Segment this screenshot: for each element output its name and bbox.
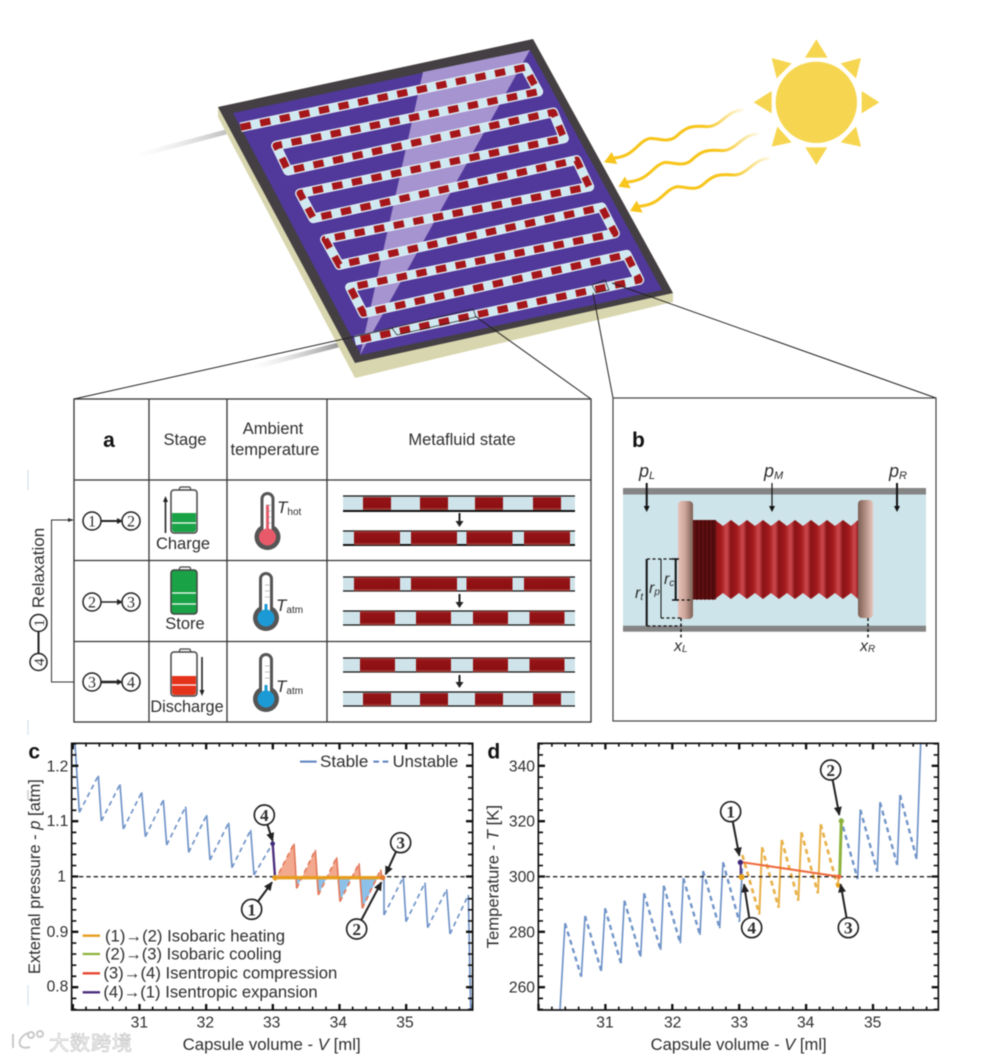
column headers (163, 420, 516, 459)
d frame and ticks (537, 743, 938, 1010)
thermometer: hot: T (277, 498, 287, 517)
thermometer: ambient store (253, 579, 303, 631)
pressure arrows and labels: p (764, 461, 774, 481)
c frame and ticks (72, 743, 473, 1010)
transition 3 to 4: 4 (127, 674, 135, 692)
column headers: Stage (163, 431, 207, 449)
serpentine tube (241, 67, 639, 341)
transition 1 to 2: 1 (88, 514, 96, 530)
transition 3 to 4: 3 (88, 674, 96, 692)
transition 2 to 3: 3 (127, 594, 135, 612)
thermometer: hot: hot (287, 507, 302, 518)
c tick labels: 1.2 (47, 758, 68, 775)
transition 2 to 3 (83, 593, 140, 612)
c tick labels: 33 (263, 1014, 281, 1031)
pressure arrows and labels: L (649, 470, 655, 482)
c legend process: (3)→(4) Isentropic compression (103, 963, 337, 982)
d cycle segments (738, 818, 844, 888)
panel b border (613, 398, 936, 721)
c state callouts: 1 (247, 900, 256, 919)
d tick labels: 260 (509, 980, 535, 997)
thermometer: ambient discharge: atm (286, 686, 303, 697)
radius and position labels: t (640, 592, 644, 603)
pressure arrows and labels: p (889, 461, 899, 481)
thermometer: ambient store: atm (286, 605, 303, 616)
pressure arrows and labels (638, 461, 907, 512)
d x axis title: Capsule volume - V [ml] (651, 1035, 827, 1054)
c state callouts: 4 (260, 806, 269, 825)
column headers: temperature (231, 441, 319, 459)
c tick labels: 1 (57, 869, 66, 886)
transition 3 to 4 (83, 673, 140, 692)
relaxation bracket: 4 (32, 658, 48, 666)
heat rays arrows (604, 110, 770, 213)
panel c: pressure chart (25, 740, 473, 1054)
fluid channel (623, 488, 926, 632)
battery: discharge: Discharge (150, 698, 224, 716)
panel a: cycle table (29, 399, 591, 722)
c legend process: (4)→(1) Isentropic expansion (103, 983, 318, 1002)
c isobaric and expansion segments (270, 841, 385, 880)
d tick labels: 340 (509, 758, 535, 775)
pressure arrows and labels: M (774, 470, 784, 482)
watermark logo and text: 大数跨境 (49, 1032, 132, 1055)
solar panel with serpentine metafluid tube (135, 39, 673, 378)
c legend process: (2)→(3) Isobaric cooling (105, 944, 282, 963)
c legend process: (1)→(2) Isobaric heating (105, 926, 285, 945)
transition 1 to 2: 2 (127, 514, 135, 530)
d state callouts: 2 (826, 761, 835, 780)
d tick labels: 35 (864, 1014, 882, 1031)
bellows capsule (678, 500, 873, 619)
sun (754, 39, 879, 165)
battery: discharge (150, 649, 224, 716)
panel slab side (218, 39, 673, 378)
radius and position labels: r (649, 580, 654, 597)
purple absorber surface (233, 50, 662, 355)
panel label a: a (103, 429, 115, 452)
watermark logo and text (13, 1031, 132, 1055)
d stable curve (560, 743, 921, 1010)
radius and position labels (635, 571, 875, 655)
thermometer: ambient discharge: T (276, 677, 286, 696)
c state callouts: 2 (352, 920, 361, 939)
d cycle segment curve (742, 824, 839, 914)
c legend stable unstable: Unstable (393, 752, 458, 771)
radius and position labels: R (868, 644, 875, 655)
radius dimension lines (647, 559, 868, 640)
battery: store (165, 567, 205, 633)
faint scan marks at left edge (27, 470, 29, 1005)
radius and position labels: x (860, 638, 868, 655)
d tick labels (509, 758, 882, 1031)
c tick labels: 0.8 (47, 979, 69, 996)
panel label c: c (28, 740, 40, 763)
c state callouts: 3 (396, 834, 405, 853)
radius and position labels: r (664, 571, 669, 588)
zoom connector lines (74, 280, 936, 399)
c tick labels: 34 (330, 1014, 347, 1031)
c tick labels: 0.9 (47, 924, 68, 941)
c legend stable unstable (300, 752, 458, 771)
d reference line T=300 (538, 875, 938, 879)
relaxation bracket: Relaxation (29, 528, 48, 608)
column headers: Metafluid state (408, 431, 516, 449)
d tick labels: 31 (596, 1014, 614, 1031)
d tick labels: 300 (509, 869, 535, 886)
c tick labels: 32 (197, 1014, 214, 1031)
c tick labels: 35 (396, 1014, 414, 1031)
panel d: temperature chart (484, 740, 938, 1054)
d tick labels: 32 (664, 1014, 681, 1031)
c tick labels: 1.1 (47, 813, 68, 830)
c tick labels (47, 758, 414, 1031)
metafluid state row 1 (343, 496, 575, 545)
metafluid state row 2 (343, 577, 575, 625)
transition 2 to 3: 2 (88, 594, 96, 612)
transition 1 to 2 (83, 512, 140, 530)
c reference line p=1 (72, 875, 473, 879)
panel wires (135, 132, 338, 368)
d tick labels: 33 (731, 1014, 748, 1031)
c legend process (83, 926, 337, 1002)
c x axis title: Capsule volume - V [ml] (183, 1035, 361, 1054)
panel label d: d (487, 740, 500, 763)
relaxation bracket (29, 518, 74, 682)
radius and position labels: r (635, 585, 640, 602)
c state callouts (242, 805, 411, 939)
thermometer: hot (254, 498, 302, 550)
pressure arrows and labels: R (899, 470, 907, 482)
c axis titles: External pressure - p [atm] (25, 779, 44, 974)
radius and position labels: L (682, 644, 688, 655)
battery: charge: Charge (156, 535, 210, 553)
d tick labels: 34 (797, 1014, 815, 1031)
radius and position labels: c (669, 578, 674, 589)
light wedge reflection (360, 50, 530, 355)
c cycle segment curve (275, 844, 382, 908)
d tick labels: 280 (509, 925, 535, 942)
c unstable curve (79, 776, 468, 934)
d state callouts: 4 (747, 919, 756, 938)
c legend stable unstable: Stable (320, 752, 368, 771)
d state callouts: 1 (726, 803, 735, 822)
battery: store: Store (165, 615, 205, 633)
metafluid state row 3 (343, 658, 575, 706)
table grid (74, 399, 591, 722)
radius and position labels: p (653, 587, 660, 598)
d state callouts: 3 (844, 919, 853, 938)
d unstable curve (565, 795, 917, 977)
d tick labels: 320 (509, 814, 535, 831)
relaxation bracket: 1 (32, 619, 48, 627)
d y axis title: Temperature - T [K] (484, 805, 502, 948)
d state callouts (721, 760, 858, 938)
c area fills (277, 844, 382, 908)
column headers: Ambient (243, 420, 304, 438)
pressure arrows and labels: p (639, 461, 649, 481)
panel label b: b (632, 429, 645, 452)
thermometer: ambient store: T (276, 596, 286, 615)
battery: charge (156, 487, 210, 553)
c tick labels: 31 (131, 1014, 148, 1031)
panel dark frame (218, 39, 673, 363)
panel b: capsule detail (613, 398, 936, 721)
c stable curve (75, 743, 471, 1010)
thermometer: ambient discharge (253, 660, 303, 712)
radius and position labels: x (674, 638, 682, 655)
